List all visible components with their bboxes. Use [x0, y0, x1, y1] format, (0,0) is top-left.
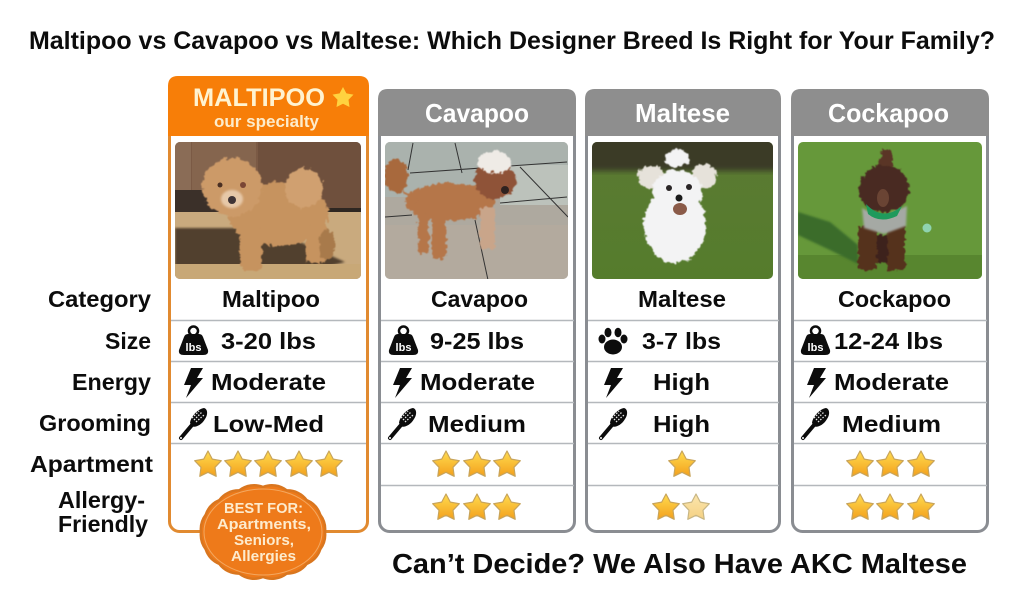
- badge: best for: BEST FOR:: [224, 501, 303, 517]
- cavapoo energy: [393, 368, 535, 398]
- cockapoo category: Cockapoo: [838, 286, 951, 312]
- photo: cavapoo: [384, 142, 568, 280]
- badge: best for: Apartments,: [217, 517, 311, 533]
- maltipoo rows: [171, 286, 366, 476]
- panel: cockapoo: [791, 89, 989, 532]
- cavapoo size: lbs: [396, 342, 411, 354]
- maltipoo size: 3-20 lbs: [221, 328, 316, 354]
- cockapoo size: 12-24 lbs: [834, 328, 943, 354]
- cavapoo size: [389, 326, 524, 355]
- cavapoo energy: Moderate: [420, 369, 535, 395]
- maltese header: [585, 89, 781, 136]
- panel: cavapoo: [378, 89, 576, 532]
- cavapoo category: Cavapoo: [431, 286, 528, 312]
- footer call to action: Can’t Decide? We Also Have AKC Maltese: [392, 548, 967, 579]
- maltipoo grooming: Low-Med: [213, 411, 324, 437]
- maltipoo category: Maltipoo: [222, 286, 320, 312]
- cockapoo header: Cockapoo: [828, 98, 949, 128]
- maltese grooming: High: [653, 411, 710, 437]
- maltese energy: High: [653, 369, 710, 395]
- cockapoo size: lbs: [808, 342, 823, 354]
- label: size: Size: [105, 328, 151, 354]
- maltese grooming: [600, 408, 710, 439]
- label: category: Category: [48, 286, 151, 312]
- cockapoo header: [791, 89, 989, 136]
- photo: maltese: [592, 142, 773, 279]
- maltese size: [598, 328, 721, 354]
- maltipoo energy: [184, 368, 326, 398]
- maltipoo header: [168, 76, 369, 136]
- maltese apartment stars: [669, 451, 695, 476]
- cavapoo grooming: Medium: [428, 411, 526, 437]
- maltese size: 3-7 lbs: [642, 328, 721, 354]
- label: allergy-friendly: Allergy-: [58, 487, 145, 513]
- maltese allergy stars: [653, 494, 709, 519]
- cockapoo allergy stars: [847, 494, 934, 519]
- cavapoo rows: [381, 286, 574, 519]
- badge: best for: [201, 485, 325, 579]
- photo: maltipoo: [175, 142, 361, 279]
- label: energy: Energy: [72, 369, 151, 395]
- badge: best for: Seniors,: [234, 533, 294, 549]
- cavapoo allergy stars: [433, 494, 520, 519]
- title: Maltipoo vs Cavapoo vs Maltese: Which Designer Breed Is Right for Your Family?: [29, 27, 995, 55]
- maltese category: Maltese: [638, 286, 726, 312]
- maltipoo header: our specialty: [214, 113, 320, 131]
- maltipoo energy: Moderate: [211, 369, 326, 395]
- cockapoo apartment stars: [847, 451, 934, 476]
- cockapoo energy: [807, 368, 949, 398]
- label: apartment: Apartment: [30, 451, 153, 477]
- photo: cockapoo: [798, 142, 982, 279]
- cockapoo grooming: Medium: [842, 411, 941, 437]
- cavapoo size: 9-25 lbs: [430, 328, 524, 354]
- label: allergy-friendly: Friendly: [58, 511, 148, 537]
- maltese energy: [604, 368, 710, 398]
- label: grooming: Grooming: [39, 410, 151, 436]
- maltese rows: [588, 286, 779, 519]
- cockapoo size: [801, 326, 943, 355]
- panel: maltese: [585, 89, 781, 532]
- maltipoo size: lbs: [186, 342, 201, 354]
- cockapoo grooming: [802, 408, 941, 439]
- label: allergy-friendly: [58, 487, 148, 537]
- cockapoo rows: [794, 286, 987, 519]
- badge: best for: Allergies: [231, 549, 296, 565]
- maltipoo grooming: [180, 408, 324, 439]
- cavapoo header: Cavapoo: [425, 98, 529, 128]
- panel: maltipoo: [168, 76, 369, 532]
- cockapoo energy: Moderate: [834, 369, 949, 395]
- maltipoo apartment stars: [195, 451, 342, 476]
- maltese header: Maltese: [635, 98, 730, 128]
- cavapoo grooming: [389, 408, 526, 439]
- cavapoo header: [378, 89, 576, 136]
- cavapoo apartment stars: [433, 451, 520, 476]
- maltipoo size: [179, 326, 316, 355]
- row labels: [30, 286, 153, 537]
- maltipoo header: MALTIPOO: [193, 84, 325, 112]
